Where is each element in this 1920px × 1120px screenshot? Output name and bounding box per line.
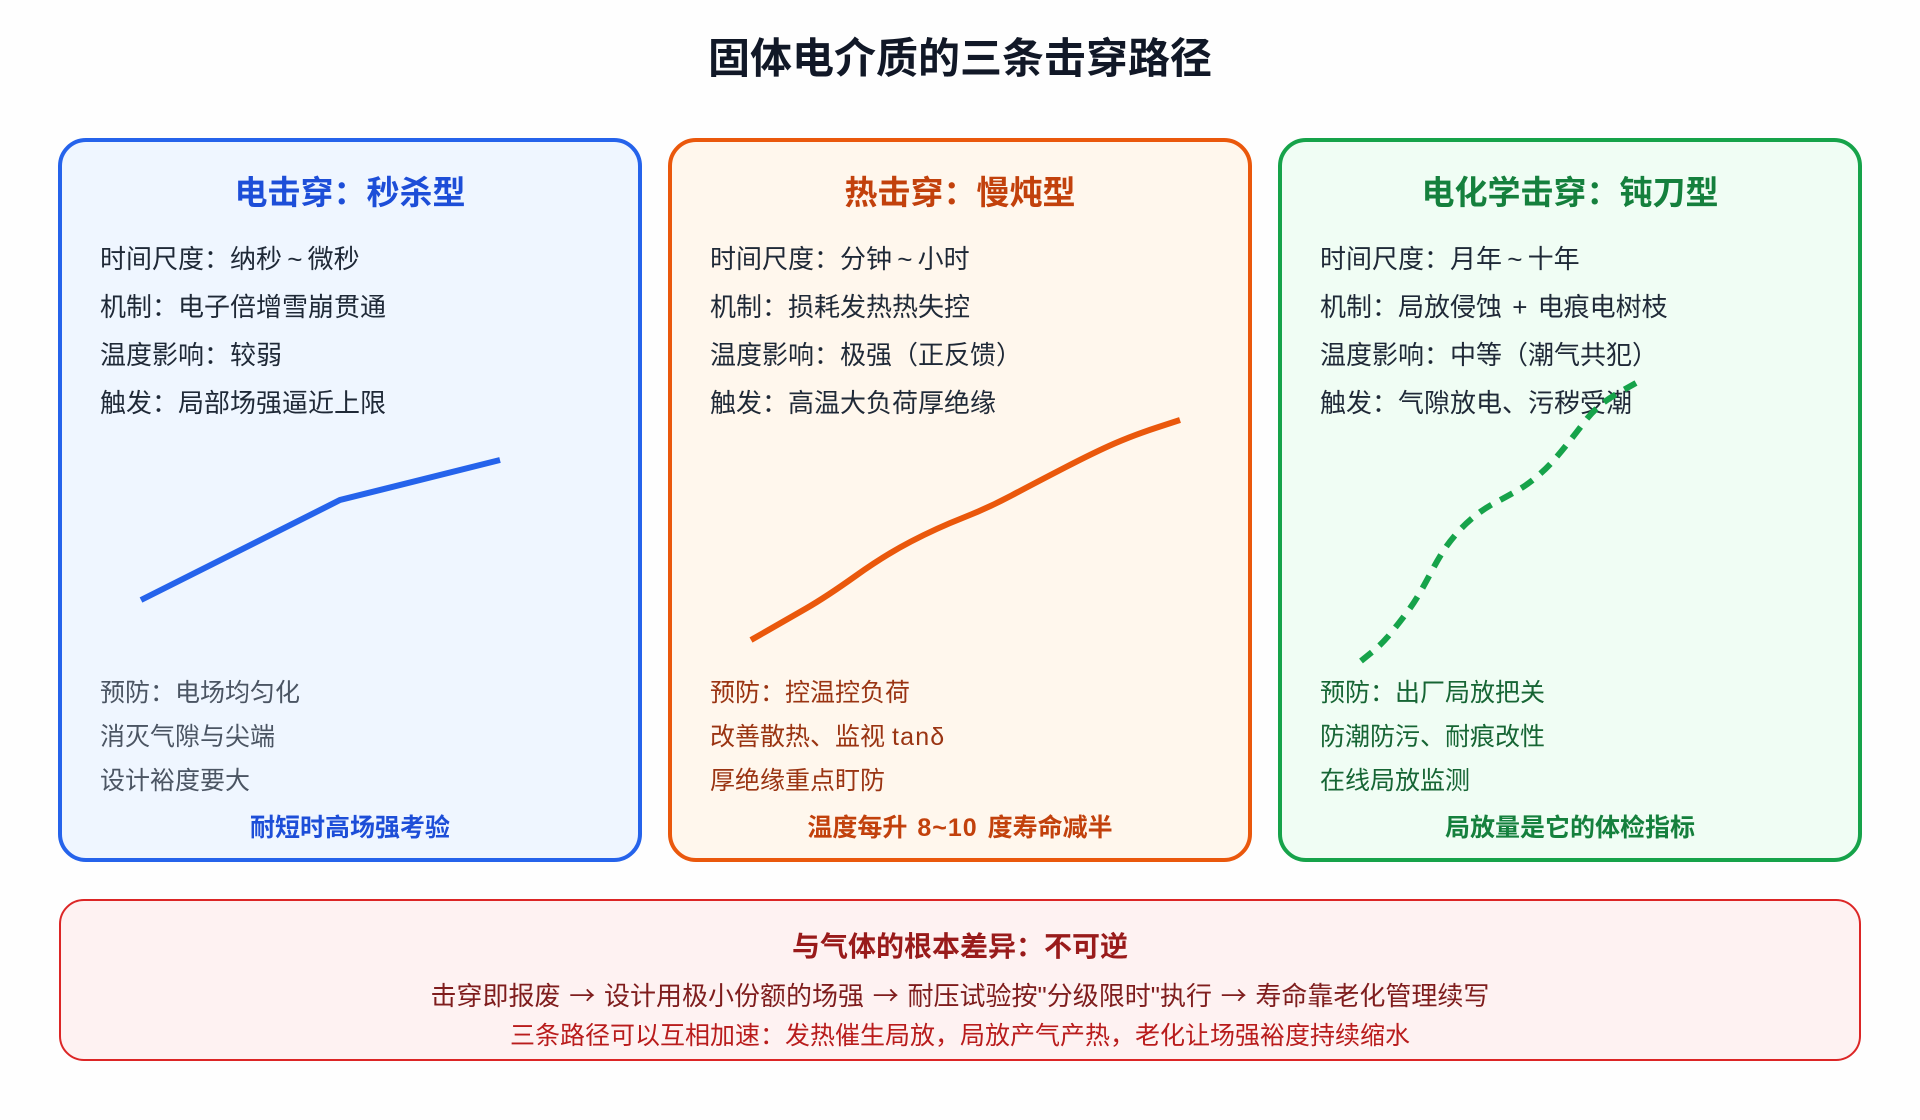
text: prevention 2: 消灭气隙与尖端 <box>100 723 275 751</box>
text: time scale: 时间尺度：月年 ~ 十年 <box>1320 244 1580 274</box>
panel: electrochemical breakdown <box>1278 138 1862 862</box>
text: mechanism: 机制：电子倍增雪崩贯通 <box>100 292 386 322</box>
title: 固体电介质的三条击穿路径 <box>708 35 1212 82</box>
footer note: 耐短时高场强考验 <box>250 814 450 842</box>
text: temperature influence: 温度影响：极强（正反馈） <box>710 340 1022 370</box>
bottom text: mutual acceleration: 三条路径可以互相加速：发热催生局放，局放产气产热，老化让场强裕度持续缩水 <box>510 1022 1410 1050</box>
bottom heading: 与气体的根本差异：不可逆 <box>792 931 1128 962</box>
footer note: 局放量是它的体检指标 <box>1445 814 1695 842</box>
text: prevention 1: 预防：控温控负荷 <box>710 679 910 707</box>
panel heading: thermal: 热击穿：慢炖型 <box>844 174 1076 211</box>
chart: fast breakdown line <box>140 457 501 603</box>
text: prevention 2: 改善散热、监视 tanδ <box>710 723 945 751</box>
text: mechanism: 机制：局放侵蚀 + 电痕电树枝 <box>1320 292 1668 322</box>
chart: thermal runaway curve <box>750 417 1181 643</box>
bottom text: chain of consequences: 击穿即报废 → 设计用极小份额的场强 → 耐压试验按"分级限时"执行 → 寿命靠老化管理续写 <box>431 976 1489 1013</box>
panel heading: electrical: 电击穿：秒杀型 <box>234 174 466 211</box>
text: time scale: 时间尺度：纳秒 ~ 微秒 <box>100 244 360 274</box>
text: trigger: 触发：气隙放电、污秽受潮 <box>1320 388 1632 418</box>
text: time scale: 时间尺度：分钟 ~ 小时 <box>710 244 970 274</box>
text: trigger: 触发：高温大负荷厚绝缘 <box>710 388 996 418</box>
text: prevention 2: 防潮防污、耐痕改性 <box>1320 723 1545 751</box>
panel: electrical breakdown <box>58 138 642 862</box>
text: temperature influence: 温度影响：中等（潮气共犯） <box>1320 340 1658 370</box>
text: temperature influence: 温度影响：较弱 <box>100 340 282 370</box>
text: prevention 3: 在线局放监测 <box>1320 767 1470 795</box>
text: prevention 1: 预防：电场均匀化 <box>100 679 300 707</box>
chart: dashed ageing curve <box>1359 380 1638 664</box>
panel heading: electrochemical: 电化学击穿：钝刀型 <box>1422 174 1718 211</box>
text: trigger: 触发：局部场强逼近上限 <box>100 388 386 418</box>
panel: difference from gases <box>59 899 1861 1061</box>
panel: thermal breakdown <box>668 138 1252 862</box>
text: prevention 1: 预防：出厂局放把关 <box>1320 679 1545 707</box>
text: prevention 3: 设计裕度要大 <box>100 767 250 795</box>
text: mechanism: 机制：损耗发热热失控 <box>710 292 970 322</box>
text: prevention 3: 厚绝缘重点盯防 <box>710 767 885 795</box>
footer note: 温度每升 8~10 度寿命减半 <box>807 814 1113 842</box>
